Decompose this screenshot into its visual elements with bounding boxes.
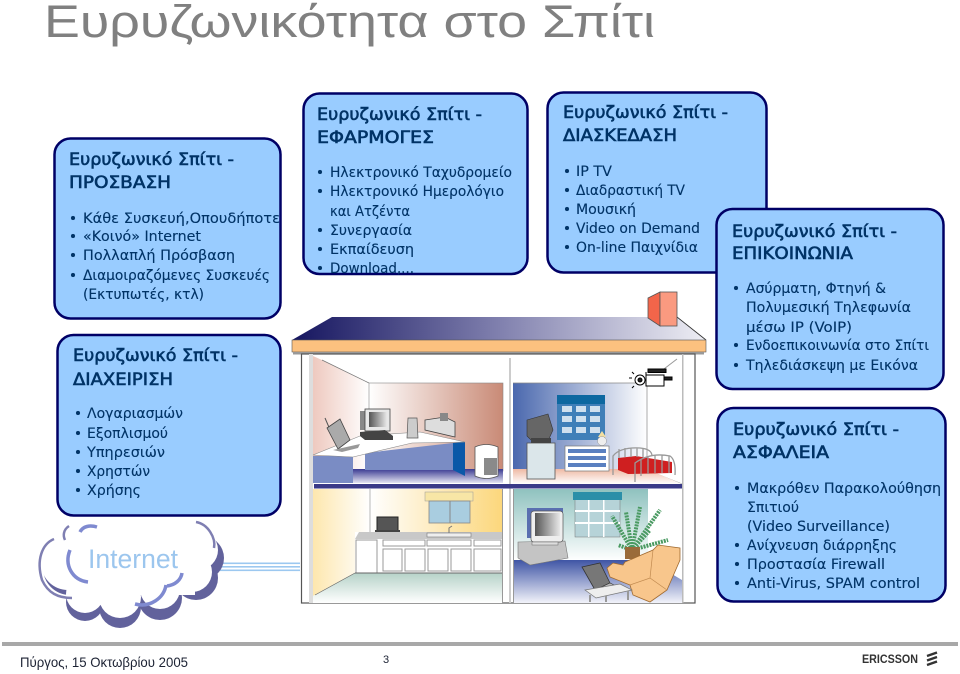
access heading: Ευρυζωνικό Σπίτι - [69,150,234,169]
entertainment list: Video on Demand [576,221,700,237]
security heading [733,420,899,462]
counter with sink [355,526,502,539]
communication list: Ασύρματη, Φτηνή & [746,281,886,297]
management heading: ΔΙΑΧΕΙΡΙΣΗ [73,370,173,389]
entertainment list: Διαδραστική TV [576,183,685,199]
access list: Διαμοιραζόμενες Συσκευές [83,268,270,284]
icon: security camera [629,359,677,388]
entertainment list: Μουσική [576,202,636,218]
footer date: Πύργος, 15 Οκτωβρίου 2005 [20,654,188,670]
icon: armchair [607,545,680,602]
house walls [302,354,695,603]
roof [292,317,706,354]
panel: security [718,408,946,602]
panel: applications [304,94,528,277]
applications list: και Ατζέντα [330,204,410,220]
icon: small terminal [375,517,400,537]
security list: Προστασία Firewall [747,557,885,573]
footer [2,642,958,670]
icon: brand logo [927,652,937,665]
room: bedroom [513,359,682,484]
security list: Σπιτιού [747,500,799,516]
entertainment heading: Ευρυζωνικό Σπίτι - [563,103,728,122]
security list: Μακρόθεν Παρακολούθηση [747,481,941,497]
management list: Χρήσης [87,483,141,499]
management list: Λογαριασμών [87,406,183,422]
access list: (Εκτυπωτές, κτλ) [83,287,204,303]
security heading: Ευρυζωνικό Σπίτι - [733,420,899,439]
access list: «Κοινό» Internet [83,229,202,245]
communication list: Πολυμεσική Τηλεφωνία [746,300,911,316]
icon: internet cloud [40,514,224,628]
security list: Ανίχνευση διάρρηξης [747,538,897,554]
icon: computer [360,409,393,440]
security list: Anti-Virus, SPAM control [747,576,920,592]
entertainment heading: ΔΙΑΣΚΕΔΑΣΗ [563,126,677,145]
communication heading [732,222,897,263]
panel: entertainment [548,92,766,272]
access list [71,211,280,303]
access list: Πολλαπλή Πρόσβαση [83,248,235,264]
applications list: Download,... [330,261,414,277]
icon: laptop on table [582,563,632,602]
icon: lamp [598,431,606,446]
management list: Χρηστών [87,464,150,480]
room: kitchen [313,489,502,603]
applications list: Συνεργασία [330,223,412,239]
icon: cordless phone [325,418,360,452]
entertainment list [565,164,700,256]
icon: cabinet with computer monitor [527,414,555,479]
management list: Υπηρεσιών [86,445,165,461]
access heading: ΠΡΟΣΒΑΣΗ [69,173,171,192]
applications list: Ηλεκτρονικό Ταχυδρομείο [330,165,512,181]
chimney [648,292,677,326]
icon: white tower device [475,444,498,478]
panel: access [54,138,280,318]
room: living room [514,489,682,603]
entertainment heading [563,103,728,145]
communication list [734,281,929,374]
security heading: ΑΣΦΑΛΕΙΑ [733,443,830,462]
communication list: Τηλεδιάσκεψη με Εικόνα [745,358,918,374]
room: office [313,356,503,483]
window [557,395,605,440]
floor slab [314,484,682,488]
management heading [73,346,238,389]
illustration: house cross-section [292,292,706,603]
entertainment list: IP TV [576,164,612,180]
communication list: μέσω IP (VoIP) [746,320,852,336]
access list: Κάθε Συσκευή,Οπουδήποτε [83,211,280,227]
applications heading: Ευρυζωνικό Σπίτι - [317,105,482,124]
icon: bed [613,448,675,482]
entertainment list: On-line Παιχνίδια [576,240,698,256]
communication heading: Ευρυζωνικό Σπίτι - [732,222,897,241]
icon: modem [407,418,418,438]
cloud label: Internet [88,544,178,574]
icon: printer [425,413,455,437]
communication heading: ΕΠΙΚΟΙΝΩΝΙΑ [732,244,854,263]
window [425,492,473,523]
management list [76,406,183,499]
applications list [318,165,512,277]
applications heading: ΕΦΑΡΜΟΓΕΣ [317,128,434,147]
icon: television [518,508,568,565]
icon: dresser [565,446,609,471]
kitchen cabinets [355,540,502,573]
window [573,492,622,537]
management list: Εξοπλισμού [87,426,168,442]
page number: 3 [383,654,389,666]
communication list: Ενδοεπικοινωνία στο Σπίτι [746,338,929,354]
connection lines: internet to house [220,562,300,571]
applications heading [317,105,482,147]
access heading [69,150,234,192]
security list: (Video Surveillance) [747,519,890,535]
applications list: Ηλεκτρονικό Ημερολόγιο [330,184,504,200]
icon: plant [612,507,668,559]
panel: communication [716,209,944,389]
security list [735,481,941,592]
applications list: Εκπαίδευση [330,242,414,258]
panel: management [58,335,280,516]
management heading: Ευρυζωνικό Σπίτι - [73,346,238,365]
brand name: ERICSSON [862,654,918,666]
